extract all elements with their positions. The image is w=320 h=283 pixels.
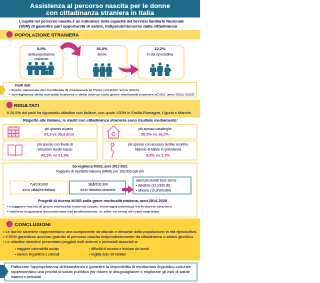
panel: conclusioni: • barriere linguistiche e culturali	[15, 252, 59, 256]
box: cittadine italiane	[10, 181, 68, 194]
title banner	[0, 0, 200, 18]
panel: conclusioni	[0, 218, 200, 260]
card: accesso tardivo: più spesso con accesso tardivo al primo	[128, 142, 188, 146]
arrow: curved top	[60, 42, 81, 56]
panel: fonti dati: • flusso nazionale del Certificato di Assistenza al Parto (CeDAP, anno 2024)	[9, 88, 139, 92]
subheading: confronto: Rispetto alle italiane, le madri con cittadinanza straniera sono risultate mediamente:	[23, 118, 178, 122]
card: casalinghe	[103, 124, 197, 139]
icon: calendar	[8, 126, 19, 137]
intro text: (SSN) di garantire pari opportunità di salute, indipendentemente dalla cittadinanza	[19, 24, 177, 28]
panel: fonti dati: • sorveglianza della mortalità materna e della ricerca sulla grave morbosità materna ItOSS, anni 2011-2025	[9, 93, 194, 97]
panel: conclusioni: CONCLUSIONI	[14, 222, 50, 227]
heading: popolazione straniera	[0, 30, 200, 40]
panel: popolazione residente	[20, 46, 63, 79]
arrow: to third panel	[118, 64, 139, 75]
arrow: to higher values	[122, 186, 134, 194]
icon: women with children	[150, 62, 172, 76]
icon: teal tab	[0, 265, 8, 278]
card: accesso tardivo: 9,8% vs 1,7%	[146, 154, 170, 158]
panel: sorveglianza ItOSS: Progetti di ricerca ItOSS sulla grave morbosità materna, anni 2014-2026	[38, 199, 167, 203]
box: valori più elevati: • africane (15,3/100.000)	[136, 188, 171, 192]
title banner: Assistenza al percorso nascita per le donne	[30, 3, 170, 10]
panel: conclusioni: • Le donne straniere rappresentano una componente strutturale e rilevante della popolazione in età riproduttiva.	[3, 230, 197, 234]
card: casalinghe: più spesso casalinghe	[138, 127, 172, 131]
panel: call to action: materna e perinatale.	[11, 275, 42, 279]
panel: donne: 51,0%	[97, 47, 108, 51]
box: cittadine italiane: 7,4/100.000	[30, 182, 48, 186]
card: casalinghe: 50,5% vs 16,2%	[141, 132, 170, 136]
icon: house with heart	[107, 126, 120, 138]
card: istruzione	[3, 141, 97, 160]
card: più giovani	[3, 124, 97, 139]
box: cittadine straniere: 16,6/100.000	[88, 182, 108, 186]
panel: sorveglianza ItOSS	[3, 163, 197, 217]
panel: conclusioni: • fragilità delle reti familiari	[89, 252, 126, 256]
icon: family group	[26, 62, 54, 75]
panel: fonti dati: Fonti dati:	[15, 83, 31, 87]
card: accesso tardivo	[103, 141, 197, 160]
panel: sorveglianza ItOSS: • maggiore rischio di grave morbosità materna (sepsi, emorragia ostetrica) tra le donne straniere	[7, 204, 172, 208]
panel: sorveglianza ItOSS: Sorveglianza ItOSS, anni 2011-2021	[72, 164, 128, 168]
panel: conclusioni: • Il SSN garantisce accesso gratuito al percorso nascita indipendentemente da cittadinanza o status giuridico.	[3, 235, 194, 239]
panel: in età riproduttiva: 12,2%	[155, 47, 166, 51]
panel: in età riproduttiva: in età riproduttiva	[147, 52, 173, 56]
box: valori più elevati: valori più elevati tra le donne	[136, 178, 177, 182]
card: più giovani: 31,3 vs 33,3 anni	[44, 132, 74, 136]
card: accesso tardivo: bilancio di salute in gravidanza	[135, 148, 181, 152]
intro text: L'equità nel percorso nascita è un indicatore della capacità del Servizio Sanitario Nazionale	[19, 20, 184, 24]
panel: call to action	[0, 263, 197, 281]
card: istruzione: più spesso con livello di	[37, 142, 73, 146]
panel: conclusioni: • maggiore vulnerabilità sociale	[15, 247, 59, 251]
card: istruzione: istruzione medio-basso	[38, 148, 73, 152]
panel: donne: donne	[97, 52, 107, 56]
icon: open book	[8, 145, 22, 156]
icon: yellow tab	[0, 86, 6, 94]
box: cittadine straniere: tra le cittadine straniere	[80, 188, 116, 192]
panel: call to action: rappresentano una priorità di salute pubblica per ridurre le disuguaglianze e migliorare gli esiti di salute	[11, 270, 190, 274]
card: più giovani: più giovani al parto	[45, 127, 73, 131]
box: valori più elevati	[133, 177, 191, 194]
panel: conclusioni: • Le cittadine straniere presentano peggiori esiti materni e perinatali associati a:	[3, 240, 138, 244]
panel: fonti dati	[0, 82, 196, 97]
intro text	[19, 20, 184, 28]
heading: risultati	[0, 100, 200, 118]
panel: popolazione residente: residente	[35, 57, 49, 61]
heading: risultati: RISULTATI	[14, 103, 39, 108]
panel: donne	[78, 46, 127, 79]
card: istruzione: 42,2% vs 21,9%	[41, 154, 70, 158]
icon: pregnant woman	[111, 143, 114, 158]
box: valori più elevati: • asiatiche (13,2/100.00)	[136, 184, 170, 188]
box: cittadine straniere	[70, 181, 126, 194]
panel: sorveglianza ItOSS: • barriera linguistica documentata dai professionisti, in oltre un terzo dei casi segnalati	[7, 210, 159, 214]
panel: popolazione residente: 9,0%	[37, 47, 46, 51]
heading: popolazione straniera: POPOLAZIONE STRANIERA	[15, 32, 80, 37]
panel: conclusioni: • difficoltà di accesso e fruizione dei servizi	[89, 247, 150, 251]
heading: risultati: Il 20,5% dei parti ha riguardato cittadine non italiane, con quote >30% in Emilia-Romagna, Liguria e Marche.	[7, 111, 192, 115]
panel: popolazione residente: della popolazione	[28, 52, 55, 56]
panel: in età riproduttiva	[138, 46, 184, 79]
panel: call to action: Rafforzare l'appropriatezza dell'assistenza e garantire la disponibilità di mediazione linguistico-culturale	[11, 265, 191, 269]
box: cittadine italiane: tra le cittadine italiane	[23, 188, 56, 192]
title banner: con cittadinanza straniera in Italia	[46, 10, 154, 17]
icon: three women	[92, 63, 112, 77]
panel: sorveglianza ItOSS: Rapporto di mortalità materna (MMR) per 100.000 nati vivi	[56, 170, 144, 174]
